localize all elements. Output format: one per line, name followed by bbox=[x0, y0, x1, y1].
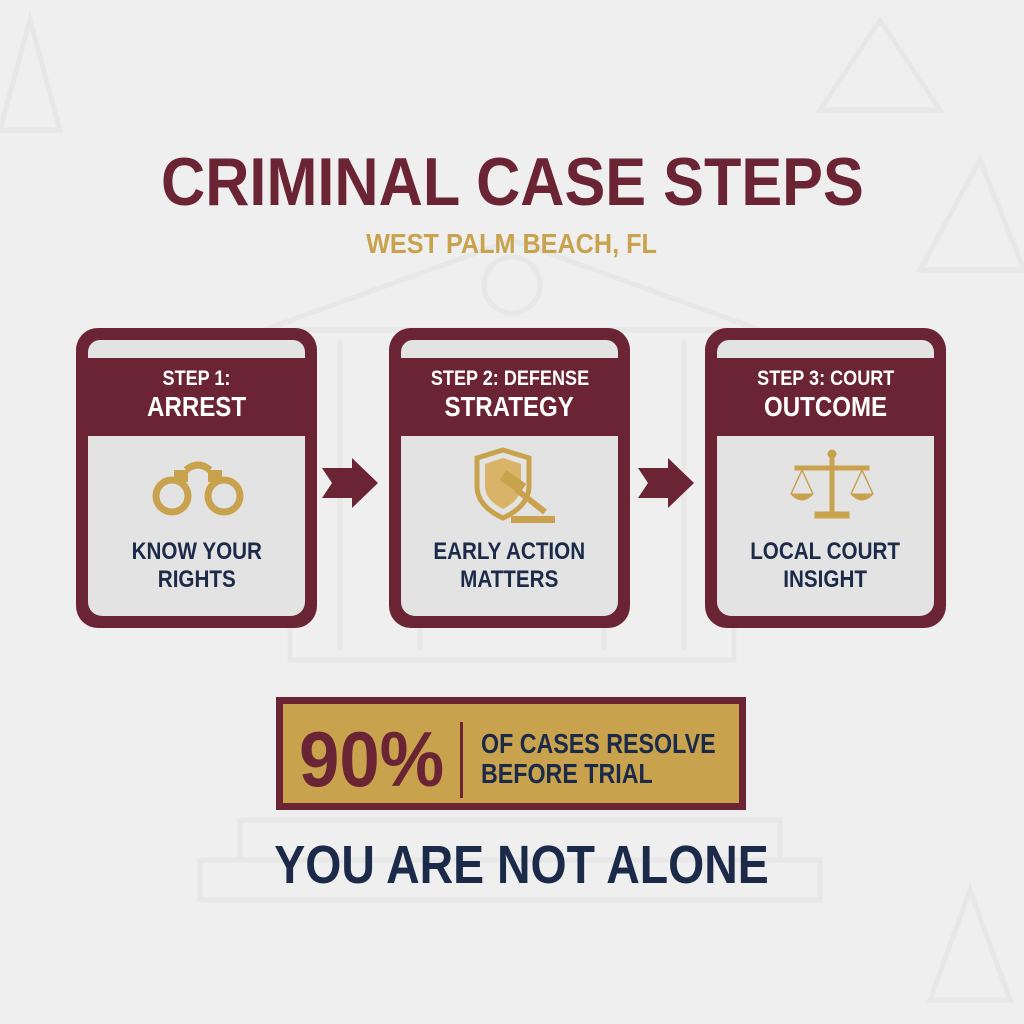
stat text: BEFORE TRIAL bbox=[481, 758, 653, 789]
text: know your rights: RIGHTS bbox=[158, 566, 235, 593]
text: early action matters: MATTERS bbox=[460, 566, 559, 593]
text: early action matters: EARLY ACTION bbox=[434, 538, 585, 565]
text: local court insight: LOCAL COURT bbox=[751, 538, 900, 565]
icon: scales of justice bbox=[790, 450, 874, 518]
panel: step 1 bbox=[76, 328, 317, 628]
heading: step 1: ARREST bbox=[147, 391, 246, 422]
icon: shield with gavel bbox=[474, 447, 555, 523]
heading: step 2: STEP 2: DEFENSE bbox=[430, 367, 589, 390]
text: early action matters bbox=[434, 538, 585, 593]
text: local court insight: INSIGHT bbox=[784, 566, 867, 593]
stat text bbox=[481, 728, 716, 789]
text: know your rights bbox=[131, 538, 262, 593]
title: CRIMINAL CASE STEPS bbox=[161, 144, 863, 220]
arrow 1 bbox=[322, 458, 378, 508]
heading: step 2 bbox=[430, 367, 589, 422]
stat number: 90% bbox=[299, 715, 444, 803]
callout: 90% statistic bbox=[276, 697, 746, 810]
subtitle: WEST PALM BEACH, FL bbox=[367, 228, 657, 259]
heading: step 3: OUTCOME bbox=[764, 391, 887, 422]
tagline: YOU ARE NOT ALONE bbox=[275, 835, 769, 895]
text: local court insight bbox=[751, 538, 900, 593]
panel: step 2 bbox=[389, 328, 630, 628]
arrow 2 bbox=[638, 458, 694, 508]
stat text: OF CASES RESOLVE bbox=[481, 728, 716, 759]
panel: step 3 bbox=[705, 328, 946, 628]
text: know your rights: KNOW YOUR bbox=[131, 538, 262, 565]
heading: step 1 bbox=[147, 367, 246, 422]
heading: step 3: STEP 3: COURT bbox=[757, 367, 894, 390]
icon: handcuffs bbox=[152, 461, 244, 516]
heading: step 1: STEP 1: bbox=[163, 367, 230, 390]
heading: step 3 bbox=[757, 367, 894, 422]
heading: step 2: STRATEGY bbox=[445, 391, 574, 422]
